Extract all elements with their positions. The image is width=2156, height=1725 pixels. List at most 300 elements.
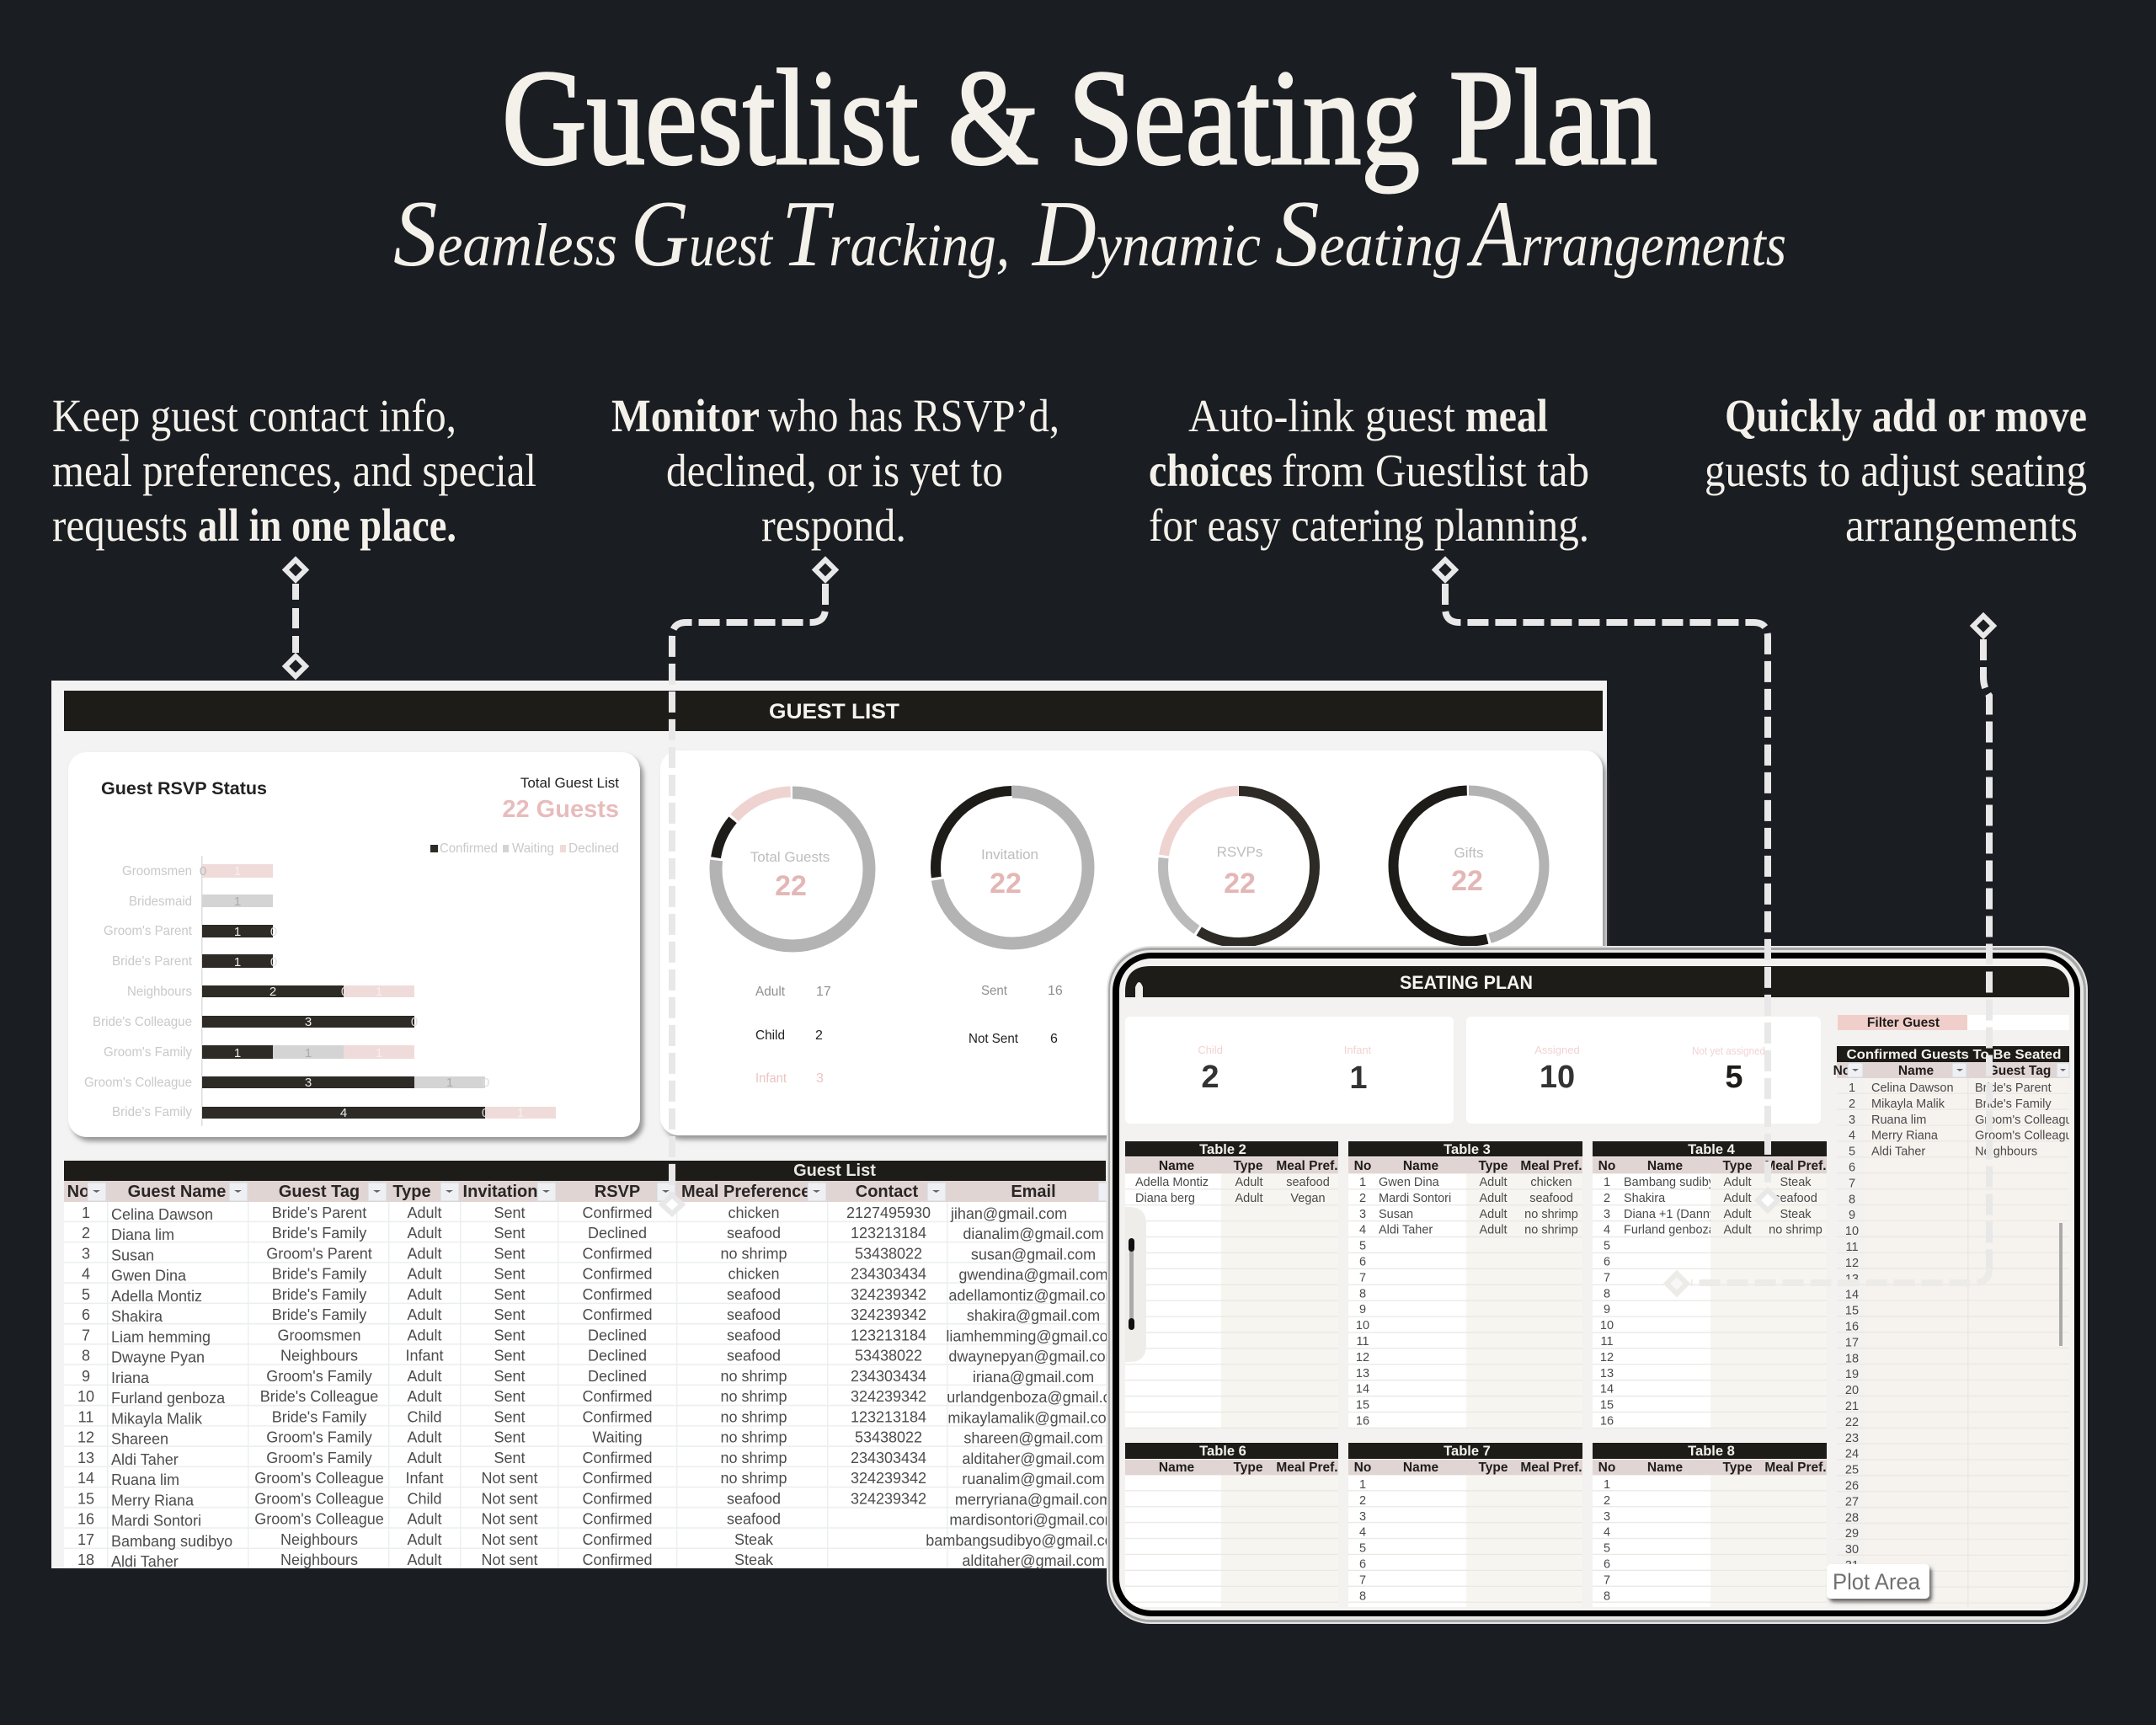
column: RSVP: Confirmed bbox=[582, 1531, 653, 1548]
column: guest name: Mikayla Malik bbox=[111, 1410, 203, 1427]
column: meal preference: Steak bbox=[734, 1531, 774, 1548]
confirmed guests list: Groom's Colleague bbox=[1975, 1114, 2079, 1127]
seating table 4: Shakira bbox=[1624, 1192, 1666, 1205]
donut: total guests: 22 bbox=[775, 870, 807, 902]
panel: guest list sheet bbox=[51, 681, 1607, 1570]
column: guest name: Celina Dawson bbox=[111, 1206, 213, 1223]
column: guest tag: Groom's Family bbox=[266, 1368, 372, 1385]
column: number: 13 bbox=[77, 1450, 94, 1466]
tablet screen content bbox=[1125, 966, 2079, 1607]
column: number: 1 bbox=[82, 1204, 90, 1221]
column: meal preference: seafood bbox=[727, 1327, 781, 1343]
donut: invitation: Invitation bbox=[981, 846, 1038, 862]
column: meal preference: chicken bbox=[728, 1204, 780, 1221]
confirmed guests list: No bbox=[1833, 1064, 1850, 1078]
seating table 8: 2 bbox=[1604, 1494, 1610, 1508]
confirmed guests list: 9 bbox=[1849, 1209, 1855, 1222]
seating table 4: no shrimp bbox=[1769, 1224, 1822, 1237]
column: number: 12 bbox=[77, 1429, 94, 1446]
subtitle: Arrangements bbox=[1466, 182, 1786, 286]
column: meal preference: no shrimp bbox=[720, 1450, 787, 1466]
column: meal preference: no shrimp bbox=[720, 1408, 787, 1425]
column: invitation: Sent bbox=[494, 1408, 526, 1425]
seating table 8: 3 bbox=[1604, 1510, 1610, 1524]
text block: meal choices bbox=[1149, 390, 1589, 551]
seating table 8: Type bbox=[1722, 1461, 1753, 1475]
seating table 3: Type bbox=[1478, 1159, 1508, 1173]
confirmed guests list: 27 bbox=[1845, 1495, 1859, 1509]
invitation breakdown: 16 bbox=[1048, 984, 1063, 998]
seating table 4: seafood bbox=[1774, 1192, 1817, 1205]
column: email: liamhemming@gmail.com bbox=[946, 1327, 1121, 1344]
column: contact: 324239342 bbox=[851, 1388, 926, 1405]
column: contact: 234303434 bbox=[851, 1368, 926, 1385]
column: number: 16 bbox=[77, 1511, 94, 1528]
subtitle: Tracking, bbox=[782, 182, 1010, 286]
column: type: Infant bbox=[405, 1348, 444, 1365]
seating table 3: 13 bbox=[1356, 1367, 1369, 1381]
guest list header bar bbox=[64, 691, 1603, 731]
bar chart: Bridesmaid bbox=[129, 895, 192, 909]
column: guest tag: Groom's Family bbox=[266, 1450, 372, 1466]
column: guest tag: Bride's Colleague bbox=[260, 1388, 378, 1405]
seating table 8: 4 bbox=[1604, 1526, 1610, 1540]
column: email: merryriana@gmail.com bbox=[955, 1491, 1112, 1508]
seating table 3 bbox=[1348, 1141, 1582, 1429]
column: RSVP: Declined bbox=[588, 1327, 647, 1343]
seating table 3: 10 bbox=[1356, 1319, 1369, 1332]
column: guest name: Merry Riana bbox=[111, 1492, 195, 1509]
column: number: 14 bbox=[77, 1470, 94, 1487]
seating table 4: Name bbox=[1647, 1159, 1683, 1173]
column: meal preference: no shrimp bbox=[720, 1245, 787, 1262]
donut: gifts: 22 bbox=[1451, 865, 1483, 897]
table header row: Type bbox=[392, 1183, 431, 1201]
bar chart: 2 bbox=[270, 985, 276, 999]
text block: monitor RSVP: respond. bbox=[761, 499, 906, 551]
confirmed guests list: 5 bbox=[1849, 1146, 1855, 1159]
seating table 4: 6 bbox=[1604, 1255, 1610, 1268]
column: invitation: Sent bbox=[494, 1225, 526, 1242]
seating plan heading: SEATING PLAN bbox=[1400, 972, 1533, 993]
total guest list caption: Total Guest List bbox=[520, 775, 619, 791]
column: email: mardisontori@gmail.com bbox=[949, 1512, 1118, 1529]
seating table 6 bbox=[1125, 1443, 1338, 1607]
guest type breakdown: Child bbox=[755, 1028, 785, 1043]
seating table 2: Type bbox=[1233, 1159, 1263, 1173]
seating table 3: 11 bbox=[1356, 1335, 1369, 1348]
column: guest tag: Groom's Colleague bbox=[254, 1511, 384, 1528]
column: guest tag: Groom's Colleague bbox=[254, 1490, 384, 1507]
panel: summary donut charts card bbox=[660, 750, 1603, 1135]
connector: add or move arrow bbox=[1667, 616, 1993, 1294]
column: guest name: Dwayne Pyan bbox=[111, 1349, 205, 1366]
subtitle bbox=[393, 182, 1786, 286]
column: guest name: Shakira bbox=[111, 1308, 163, 1325]
bar chart: 3 bbox=[305, 1015, 312, 1029]
guest type breakdown: Adult bbox=[755, 985, 786, 999]
seating table 3: Susan bbox=[1379, 1208, 1413, 1221]
confirmed guests list: Bride's Parent bbox=[1975, 1081, 2052, 1095]
column: meal preference: no shrimp bbox=[720, 1368, 787, 1385]
bar chart: Bride's Colleague bbox=[93, 1015, 192, 1029]
confirmed guests list: Aldi Taher bbox=[1871, 1146, 1925, 1159]
seating table 3: chicken bbox=[1530, 1176, 1572, 1189]
column: guest name: Aldi Taher bbox=[111, 1451, 179, 1468]
seating table 4: Type bbox=[1722, 1159, 1753, 1173]
confirmed guests list: Guest Tag bbox=[1988, 1064, 2051, 1078]
bar chart: 0 bbox=[341, 985, 348, 999]
seating table 2: Adella Montiz bbox=[1135, 1176, 1209, 1189]
chart legend: Waiting bbox=[512, 841, 554, 856]
column: meal preference: no shrimp bbox=[720, 1388, 787, 1405]
confirmed guests list: 1 bbox=[1849, 1081, 1855, 1095]
confirmed guests list: Celina Dawson bbox=[1871, 1081, 1954, 1095]
bar chart: 0 bbox=[270, 955, 277, 969]
guest type breakdown: 2 bbox=[815, 1028, 823, 1043]
seating table 4: 15 bbox=[1600, 1399, 1614, 1413]
bar chart: 4 bbox=[340, 1106, 347, 1120]
column: guest tag: Neighbours bbox=[280, 1551, 358, 1568]
column: guest tag: Bride's Family bbox=[272, 1266, 366, 1283]
confirmed guests list: 18 bbox=[1845, 1352, 1859, 1365]
column: email: dianalim@gmail.com bbox=[963, 1226, 1104, 1242]
seating table 7: 8 bbox=[1359, 1589, 1366, 1603]
seating table 4: 5 bbox=[1604, 1240, 1610, 1253]
column: invitation: Not sent bbox=[481, 1551, 538, 1568]
seating table 4: Furland genboza bbox=[1624, 1224, 1716, 1237]
column: contact: 123213184 bbox=[851, 1408, 926, 1425]
column: guest tag: Groomsmen bbox=[277, 1327, 361, 1343]
summary card: child and infant: 2 bbox=[1201, 1060, 1219, 1095]
seating table 7: 3 bbox=[1359, 1510, 1366, 1524]
seating table 4 bbox=[1593, 1141, 1827, 1429]
table header row: No bbox=[67, 1183, 89, 1201]
column: number: 10 bbox=[77, 1388, 94, 1405]
table header row: Guest Tag bbox=[279, 1183, 360, 1201]
confirmed guests list: 2 bbox=[1849, 1097, 1855, 1111]
bar chart: 0 bbox=[483, 1076, 489, 1090]
column: number: 17 bbox=[77, 1531, 94, 1548]
column: meal preference: no shrimp bbox=[720, 1429, 787, 1446]
column: invitation: Sent bbox=[494, 1306, 526, 1323]
column: number: 11 bbox=[78, 1408, 93, 1425]
filter guest box bbox=[1838, 1015, 2069, 1030]
guest type breakdown: Infant bbox=[755, 1071, 787, 1086]
seating table 7: Name bbox=[1403, 1461, 1438, 1475]
column: guest name: Shareen bbox=[111, 1431, 168, 1448]
text block: monitor RSVP bbox=[611, 390, 1059, 551]
column: invitation: Not sent bbox=[481, 1511, 538, 1528]
column: number: 2 bbox=[82, 1225, 90, 1242]
seating table 4: Steak bbox=[1780, 1176, 1812, 1189]
seating table 3: 16 bbox=[1356, 1415, 1369, 1429]
seating table 3: Adult bbox=[1479, 1208, 1508, 1221]
column: RSVP: Declined bbox=[588, 1348, 647, 1365]
column: type: Adult bbox=[407, 1245, 442, 1262]
column: contact: 234303434 bbox=[851, 1450, 926, 1466]
seating table 3: 15 bbox=[1356, 1399, 1369, 1413]
seating table 8: Meal Pref. bbox=[1764, 1461, 1827, 1475]
seating table 7: 2 bbox=[1359, 1494, 1366, 1508]
column: type: Adult bbox=[407, 1266, 442, 1283]
column: guest name: Iriana bbox=[111, 1370, 150, 1386]
confirmed guests list: Ruana lim bbox=[1871, 1114, 1926, 1127]
text block: quickly add or move: Quickly add or move bbox=[1725, 390, 2087, 441]
bar chart bbox=[84, 856, 556, 1126]
column: type: Adult bbox=[407, 1306, 442, 1323]
column: email: mikaylamalik@gmail.com bbox=[947, 1409, 1119, 1426]
column: number: 7 bbox=[82, 1327, 90, 1343]
total guests number: 22 Guests bbox=[502, 796, 619, 823]
seating table 3: 6 bbox=[1359, 1255, 1366, 1268]
confirmed guests list: 3 bbox=[1849, 1114, 1855, 1127]
seating table 4: 9 bbox=[1604, 1303, 1610, 1316]
text block: meal choices: meal bbox=[1465, 390, 1548, 441]
column: invitation: Not sent bbox=[481, 1490, 538, 1507]
text block: guest contact info: all in one place. bbox=[198, 499, 456, 551]
seating table 4: 13 bbox=[1600, 1367, 1614, 1381]
seating table 4: 7 bbox=[1604, 1271, 1610, 1284]
text block: guest contact info bbox=[52, 390, 536, 551]
seating table 4: Bambang sudibyo bbox=[1624, 1176, 1721, 1189]
donut: RSVPs: 22 bbox=[1224, 868, 1256, 900]
column: type: Adult bbox=[407, 1225, 442, 1242]
seating table 2: Adult bbox=[1235, 1192, 1263, 1205]
tablet: seating plan bbox=[1107, 946, 2088, 1624]
subtitle: Seamless bbox=[393, 182, 617, 286]
summary card: assigned bbox=[1466, 1017, 1821, 1124]
bar chart: Bride's Parent bbox=[112, 954, 193, 969]
confirmed guests list: Neighbours bbox=[1975, 1146, 2037, 1159]
column: number: 4 bbox=[82, 1266, 90, 1283]
confirmed guests list bbox=[1833, 1046, 2079, 1607]
seating table 2: Name bbox=[1159, 1159, 1194, 1173]
column: email: jihan@gmail.com bbox=[950, 1205, 1067, 1222]
table header row: Invitation bbox=[463, 1183, 537, 1201]
column: contact: 2127495930 bbox=[846, 1204, 931, 1221]
column: RSVP: Declined bbox=[588, 1368, 647, 1385]
column: RSVP: Confirmed bbox=[582, 1490, 653, 1507]
donut: invitation bbox=[936, 791, 1089, 944]
seating table 3: 8 bbox=[1359, 1287, 1366, 1300]
column: guest name: Diana lim bbox=[111, 1226, 174, 1243]
seating table 8: 5 bbox=[1604, 1542, 1610, 1556]
connector: RSVP arrow bbox=[662, 559, 835, 1214]
seating table 7: No bbox=[1354, 1461, 1371, 1475]
seating table 8 bbox=[1593, 1443, 1827, 1607]
bar chart: Groom's Family bbox=[104, 1045, 192, 1060]
column: guest name: Aldi Taher bbox=[111, 1553, 179, 1570]
summary card: child and infant: Child bbox=[1198, 1044, 1223, 1056]
seating table 4: 1 bbox=[1604, 1176, 1610, 1189]
column: contact: 324239342 bbox=[851, 1490, 926, 1507]
column: guest tag: Bride's Family bbox=[272, 1225, 366, 1242]
column: meal preference: seafood bbox=[727, 1286, 781, 1303]
column: email: urlandgenboza@gmail.com bbox=[947, 1389, 1132, 1406]
subtitle: Seating bbox=[1275, 182, 1462, 286]
column: email: adellamontiz@gmail.com bbox=[948, 1287, 1118, 1304]
table header row: RSVP bbox=[595, 1183, 640, 1201]
column: invitation: Sent bbox=[494, 1327, 526, 1343]
confirmed guests list: 21 bbox=[1845, 1400, 1859, 1413]
column: type: Adult bbox=[407, 1327, 442, 1343]
seating plan header bar bbox=[1125, 966, 2069, 997]
column: type: Adult bbox=[407, 1286, 442, 1303]
seating table 3: no shrimp bbox=[1524, 1224, 1578, 1237]
seating table 3: Table 3 bbox=[1444, 1142, 1491, 1157]
bar chart: 1 bbox=[376, 1046, 382, 1060]
seating table 2: seafood bbox=[1286, 1176, 1330, 1189]
confirmed guests list: 23 bbox=[1845, 1432, 1859, 1445]
seating table 4: Adult bbox=[1723, 1208, 1752, 1221]
guest list heading: GUEST LIST bbox=[769, 700, 899, 724]
seating table 6: Name bbox=[1159, 1461, 1194, 1475]
seating table 2: Meal Pref. bbox=[1276, 1159, 1338, 1173]
column: meal preference: no shrimp bbox=[720, 1470, 787, 1487]
seating table 4: 11 bbox=[1600, 1335, 1614, 1348]
table header row: Contact bbox=[856, 1183, 919, 1201]
column: type: Adult bbox=[407, 1204, 442, 1221]
seating table 4: Adult bbox=[1723, 1176, 1752, 1189]
column: invitation: Not sent bbox=[481, 1470, 538, 1487]
confirmed guests list: 7 bbox=[1849, 1177, 1855, 1190]
seating table 4: Meal Pref. bbox=[1764, 1159, 1827, 1173]
seating table 3: Meal Pref. bbox=[1520, 1159, 1582, 1173]
summary card: child and infant bbox=[1125, 1017, 1454, 1124]
column: email: susan@gmail.com bbox=[971, 1246, 1096, 1263]
text block: guest contact info: requests bbox=[52, 499, 188, 551]
column: RSVP: Confirmed bbox=[582, 1450, 653, 1466]
seating table 7: 1 bbox=[1359, 1478, 1366, 1492]
column: email: alditaher@gmail.com bbox=[962, 1552, 1105, 1569]
column: email: dwaynepyan@gmail.com bbox=[948, 1348, 1118, 1365]
invitation breakdown: Not Sent bbox=[969, 1032, 1019, 1046]
summary card: assigned: 5 bbox=[1725, 1060, 1743, 1095]
column: guest tag: Neighbours bbox=[280, 1348, 358, 1365]
seating table 8: No bbox=[1598, 1461, 1615, 1475]
column: email: iriana@gmail.com bbox=[973, 1369, 1094, 1386]
seating table 8: 7 bbox=[1604, 1573, 1610, 1587]
bar chart: Groom's Parent bbox=[104, 924, 193, 938]
column: contact: 234303434 bbox=[851, 1266, 926, 1283]
column: RSVP: Confirmed bbox=[582, 1266, 653, 1283]
guest type breakdown bbox=[755, 985, 831, 1086]
seating table 3: Gwen Dina bbox=[1379, 1176, 1440, 1189]
column: meal preference: seafood bbox=[727, 1348, 781, 1365]
column: type: Adult bbox=[407, 1429, 442, 1446]
seating table 3: 7 bbox=[1359, 1271, 1366, 1284]
confirmed guests list: 6 bbox=[1849, 1161, 1855, 1174]
tooltip: plot area: Plot Area bbox=[1833, 1569, 1921, 1594]
seating table 2: Vegan bbox=[1290, 1192, 1326, 1205]
seating table 7 bbox=[1348, 1443, 1582, 1607]
column: type: Adult bbox=[407, 1368, 442, 1385]
confirmed guests list: 16 bbox=[1845, 1321, 1859, 1334]
seating table 8: 8 bbox=[1604, 1589, 1610, 1603]
invitation breakdown bbox=[969, 984, 1063, 1046]
seating table 3: Adult bbox=[1479, 1192, 1508, 1205]
column: number: 5 bbox=[82, 1286, 90, 1303]
confirmed guests list: Groom's Colleague bbox=[1975, 1130, 2079, 1143]
column: RSVP: Confirmed bbox=[582, 1306, 653, 1323]
chart legend: Declined bbox=[568, 841, 619, 856]
confirmed guests list: 19 bbox=[1845, 1368, 1859, 1381]
guest type breakdown: 17 bbox=[816, 985, 831, 999]
column: guest tag: Neighbours bbox=[280, 1531, 358, 1548]
confirmed guests list: 11 bbox=[1845, 1241, 1859, 1254]
column: guest tag: Groom's Family bbox=[266, 1429, 372, 1446]
column: RSVP: Confirmed bbox=[582, 1511, 653, 1528]
confirmed guests list: 13 bbox=[1845, 1273, 1859, 1286]
seating table 3: No bbox=[1354, 1159, 1371, 1173]
column: guest tag: Bride's Parent bbox=[272, 1204, 366, 1221]
column: guest name: Bambang sudibyo bbox=[111, 1533, 232, 1550]
column: guest name: Furland genboza bbox=[111, 1390, 226, 1407]
confirmed guests list: 28 bbox=[1845, 1511, 1859, 1525]
text block: guest contact info: Keep guest contact info, bbox=[52, 390, 456, 441]
confirmed guests list: 29 bbox=[1845, 1527, 1859, 1541]
seating table 3: no shrimp bbox=[1524, 1208, 1578, 1221]
bar chart: Groomsmen bbox=[122, 864, 192, 879]
column: type: Child bbox=[407, 1490, 442, 1507]
seating table 3: 1 bbox=[1359, 1176, 1366, 1189]
bar chart: Bride's Family bbox=[112, 1105, 192, 1119]
confirmed guests list: 12 bbox=[1845, 1257, 1859, 1270]
seating table 3: 2 bbox=[1359, 1192, 1366, 1205]
seating table 4: Diana +1 (Danny) bbox=[1624, 1208, 1720, 1221]
column: guest name: Susan bbox=[111, 1247, 154, 1263]
summary card: assigned: Not yet assigned bbox=[1692, 1044, 1765, 1057]
column: guest name: Ruana lim bbox=[111, 1471, 179, 1488]
seating table 4: 2 bbox=[1604, 1192, 1610, 1205]
summary card: assigned: Assigned bbox=[1534, 1044, 1580, 1056]
guest list table bbox=[64, 1161, 1132, 1570]
seating table 2 bbox=[1125, 1141, 1338, 1429]
seating table 4: 4 bbox=[1604, 1224, 1610, 1237]
seating table 2: Table 2 bbox=[1199, 1142, 1246, 1157]
text block: guest contact info: meal preferences, and special bbox=[52, 445, 536, 496]
title: Guestlist & Seating Plan bbox=[502, 43, 1657, 194]
column: contact: 324239342 bbox=[851, 1470, 926, 1487]
bar chart: 1 bbox=[234, 895, 241, 909]
connector: guest info arrow bbox=[286, 559, 306, 676]
column: type: Adult bbox=[407, 1551, 442, 1568]
summary card: child and infant: Infant bbox=[1344, 1044, 1372, 1056]
column: type: Adult bbox=[407, 1450, 442, 1466]
column: guest tag: Bride's Family bbox=[272, 1408, 366, 1425]
column: meal preference: seafood bbox=[727, 1511, 781, 1528]
subtitle: Guest bbox=[631, 182, 774, 286]
seating table 7: Meal Pref. bbox=[1520, 1461, 1582, 1475]
seating table 7: Type bbox=[1478, 1461, 1508, 1475]
table header row: Email bbox=[1011, 1183, 1056, 1201]
confirmed guests list: Confirmed Guests To Be Seated bbox=[1846, 1048, 2062, 1062]
chart legend bbox=[430, 841, 619, 856]
seating table 4: No bbox=[1598, 1159, 1615, 1173]
seating table 3: seafood bbox=[1529, 1192, 1573, 1205]
tooltip: plot area bbox=[1827, 1564, 1929, 1599]
confirmed guests list: 8 bbox=[1849, 1193, 1855, 1206]
bar chart: 0 bbox=[411, 1015, 418, 1029]
table header row: Guest Name bbox=[128, 1183, 226, 1201]
bar chart: 1 bbox=[517, 1106, 524, 1120]
column: number: 8 bbox=[82, 1348, 90, 1365]
confirmed guests list: 24 bbox=[1845, 1448, 1859, 1461]
confirmed guests list: Bride's Family bbox=[1975, 1097, 2052, 1111]
column: number: 15 bbox=[77, 1490, 94, 1507]
seating table 4: 12 bbox=[1600, 1351, 1614, 1365]
